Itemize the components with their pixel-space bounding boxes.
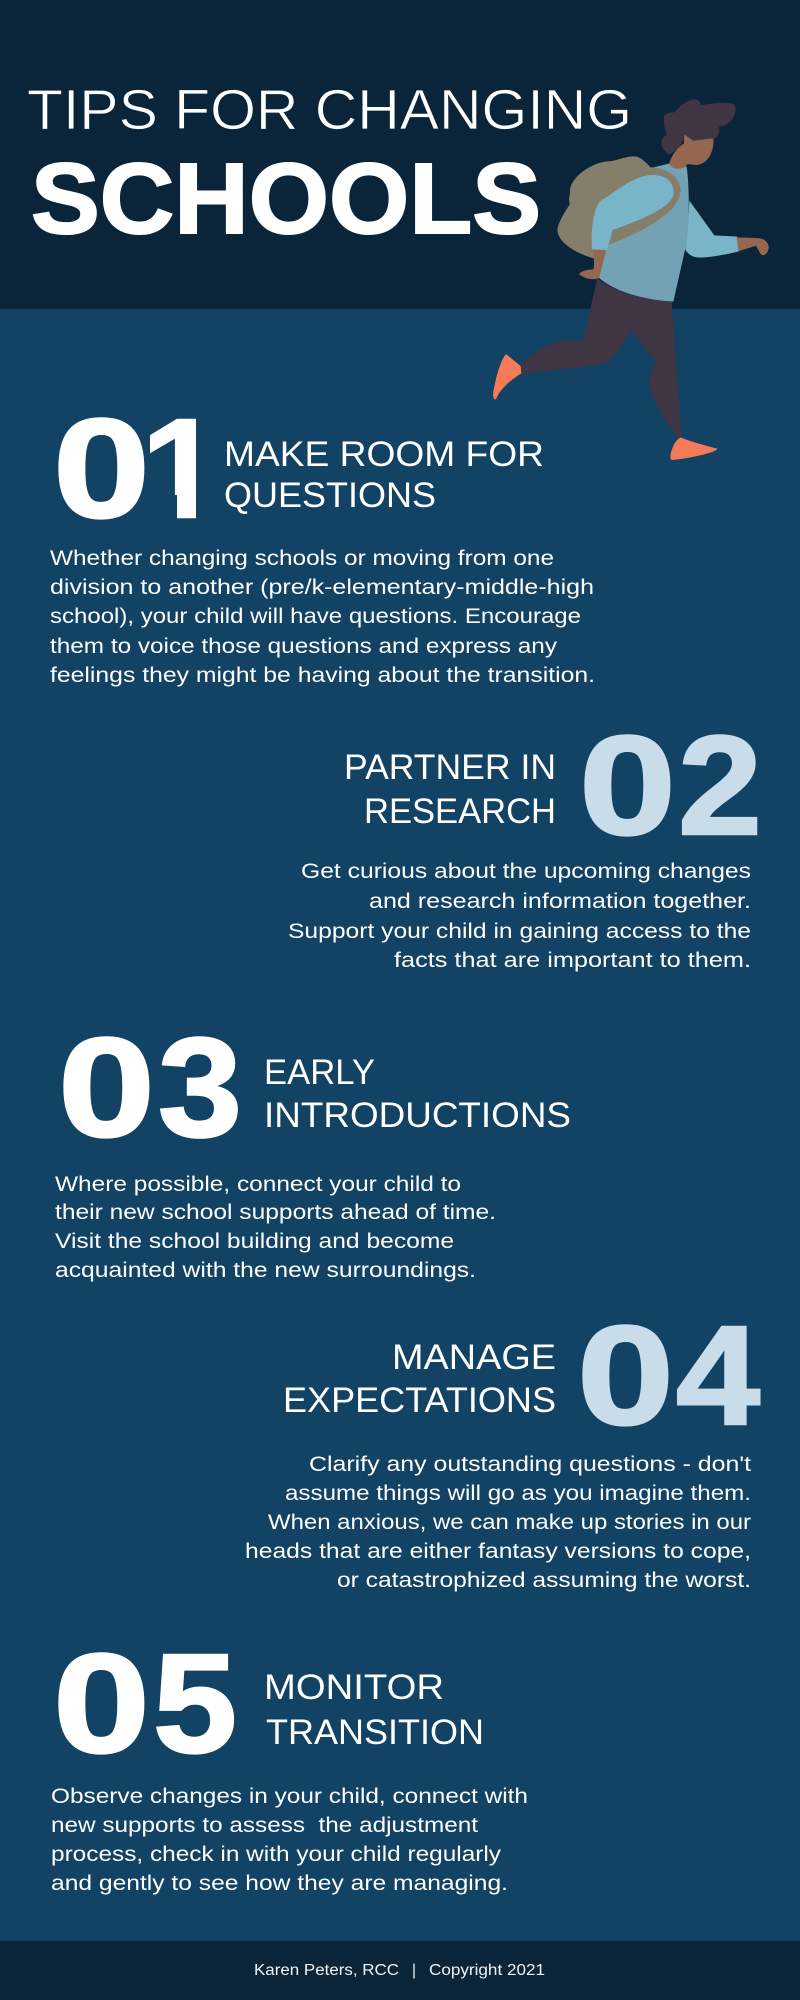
panel: tip 05 <box>51 1624 528 1895</box>
footer credit: Copyright 2021 <box>429 1962 545 1979</box>
trousers <box>521 278 682 440</box>
body text 01: feelings they might be having about the transition. <box>50 663 595 687</box>
heading 02 <box>344 748 556 831</box>
far arm <box>685 201 739 258</box>
body text 05 <box>51 1784 528 1895</box>
body text 02: Support your child in gaining access to the <box>288 919 751 943</box>
body text 01 <box>50 546 595 687</box>
number 04: 4 <box>676 1296 760 1454</box>
body text 02 <box>288 859 751 972</box>
heading 03: INTRODUCTIONS <box>264 1096 571 1135</box>
number 05: 0 <box>53 1624 150 1782</box>
heading 01 <box>224 435 544 515</box>
heading 04: EXPECTATIONS <box>283 1381 556 1420</box>
near arm <box>592 175 674 250</box>
body text 05: process, check in with your child regularly <box>51 1842 501 1866</box>
body text 03 <box>55 1172 496 1282</box>
body text 03: Visit the school building and become <box>55 1229 454 1253</box>
number 02: 0 <box>579 706 676 864</box>
number 01: 1 <box>141 389 225 547</box>
number 05 <box>53 1624 237 1782</box>
heading 05: TRANSITION <box>266 1713 484 1752</box>
body text 04 <box>245 1452 751 1592</box>
heading 04: MANAGE <box>392 1338 556 1377</box>
heading 05 <box>264 1668 484 1752</box>
number 03: 0 <box>58 1008 155 1166</box>
number 04 <box>577 1296 760 1454</box>
body text 02: Get curious about the upcoming changes <box>301 859 751 883</box>
body text 03: Where possible, connect your child to <box>55 1172 461 1196</box>
illustration: running child with backpack <box>493 99 769 460</box>
body text 04: When anxious, we can make up stories in our <box>268 1510 751 1534</box>
body text 02: facts that are important to them. <box>394 948 751 972</box>
front shoe <box>670 437 717 460</box>
body text 04: or catastrophized assuming the worst. <box>337 1568 751 1592</box>
number 05: 5 <box>153 1624 237 1782</box>
body text 01: school), your child will have questions. Encourage <box>50 604 581 628</box>
body text 04: heads that are either fantasy versions to cope, <box>245 1539 751 1563</box>
footer credit: | <box>412 1962 416 1979</box>
panel: tip 03 <box>55 1008 571 1282</box>
backpack <box>557 156 653 258</box>
heading 01: MAKE ROOM FOR <box>224 435 544 474</box>
body text 01: division to another (pre/k-elementary-middle-high <box>50 575 594 599</box>
title line 2: SCHOOLS <box>31 143 541 255</box>
body text 03: acquainted with the new surroundings. <box>55 1258 476 1282</box>
heading 01: QUESTIONS <box>224 476 436 515</box>
torso <box>598 163 689 302</box>
body text 02: and research information together. <box>369 889 751 913</box>
number 01 <box>58 417 196 520</box>
title <box>27 78 632 255</box>
heading 03: EARLY <box>264 1053 375 1092</box>
heading 02: RESEARCH <box>364 792 556 831</box>
head <box>669 134 713 169</box>
body text 05: new supports to assess the adjustment <box>51 1813 478 1837</box>
number 03 <box>58 1008 242 1166</box>
number 03: 3 <box>158 1008 242 1166</box>
number 01: 0 <box>53 389 150 547</box>
panel: tip 02 <box>288 706 762 972</box>
panel: tip 01 <box>50 389 595 687</box>
body text 05: and gently to see how they are managing. <box>51 1871 508 1895</box>
header band <box>0 0 800 309</box>
number 04: 0 <box>577 1296 674 1454</box>
heading 02: PARTNER IN <box>344 748 556 787</box>
title line 1: TIPS FOR CHANGING <box>27 78 632 142</box>
body text 05: Observe changes in your child, connect with <box>51 1784 528 1808</box>
hair <box>661 99 736 155</box>
body text 01: Whether changing schools or moving from one <box>50 546 554 570</box>
heading 05: MONITOR <box>264 1668 444 1707</box>
panel: tip 04 <box>245 1296 760 1592</box>
far hand <box>737 237 769 255</box>
body text 03: their new school supports ahead of time. <box>55 1200 496 1224</box>
number 02: 2 <box>678 706 762 864</box>
body text 01: them to voice those questions and express any <box>50 634 557 658</box>
backpack strap <box>609 167 681 245</box>
heading 03 <box>264 1053 571 1135</box>
number 02 <box>579 706 762 864</box>
near hand <box>579 249 606 279</box>
heading 04 <box>283 1338 556 1420</box>
footer credit <box>254 1962 545 1979</box>
body text 04: assume things will go as you imagine them. <box>285 1481 751 1505</box>
footer band <box>0 1941 800 2000</box>
footer credit: Karen Peters, RCC <box>254 1962 399 1979</box>
back shoe <box>493 354 521 399</box>
body text 04: Clarify any outstanding questions - don't <box>309 1452 751 1476</box>
